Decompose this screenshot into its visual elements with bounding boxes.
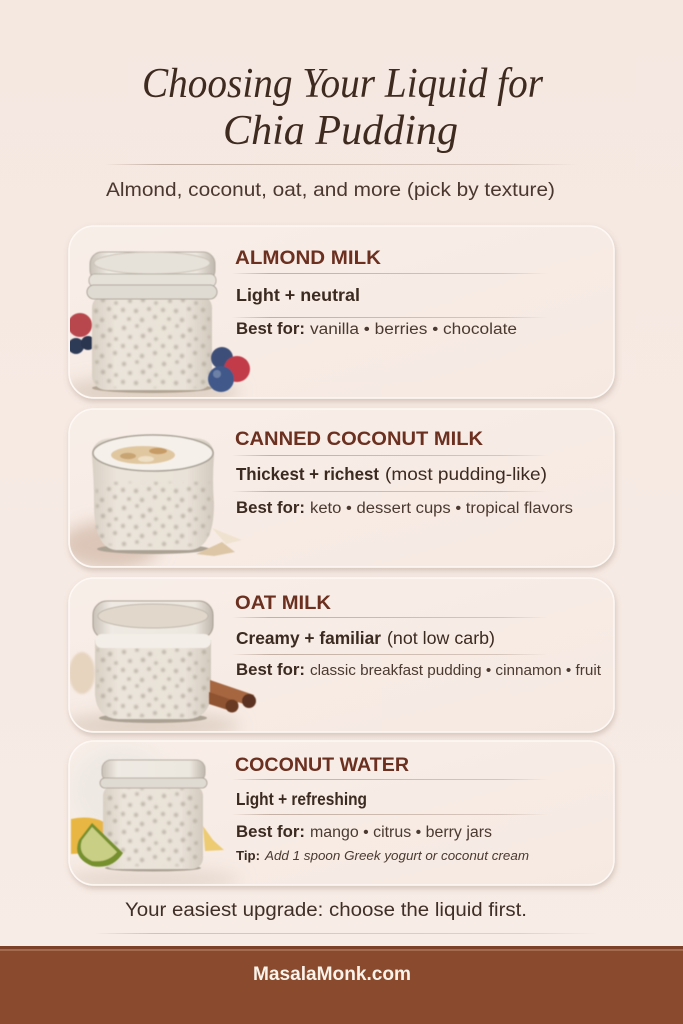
photo: coconut milk jar with flakes xyxy=(60,435,242,569)
best for: Best for: xyxy=(236,661,305,679)
texture: (most pudding-like) xyxy=(385,464,547,484)
texture: Light + neutral xyxy=(236,285,360,305)
panel: coconut water xyxy=(60,741,614,892)
best for: Best for: xyxy=(236,499,305,517)
subtitle: Almond, coconut, oat, and more (pick by texture) xyxy=(106,179,555,201)
best for xyxy=(236,661,601,679)
best for: keto • dessert cups • tropical flavors xyxy=(310,500,573,517)
texture: Creamy + familiar xyxy=(236,628,381,648)
heading: ALMOND MILK xyxy=(235,247,381,269)
photo: coconut water jar with citrus xyxy=(70,756,233,884)
heading: OAT MILK xyxy=(235,592,331,614)
panel: almond milk xyxy=(60,226,614,408)
texture xyxy=(236,628,495,648)
best for: classic breakfast pudding • cinnamon • fruit xyxy=(310,663,601,679)
best for: mango • citrus • berry jars xyxy=(310,824,492,841)
texture: Light + refreshing xyxy=(236,789,367,809)
title: Chia Pudding xyxy=(223,108,458,154)
best for: vanilla • berries • chocolate xyxy=(310,321,517,338)
panel: oat milk xyxy=(60,578,614,740)
closing line: Your easiest upgrade: choose the liquid first. xyxy=(125,900,527,921)
heading: CANNED COCONUT MILK xyxy=(235,428,483,450)
footer band xyxy=(0,946,683,1024)
heading: COCONUT WATER xyxy=(235,754,409,776)
best for xyxy=(236,823,492,841)
panel: canned coconut milk xyxy=(60,409,614,569)
texture xyxy=(236,464,547,484)
best for xyxy=(236,499,573,517)
title: Choosing Your Liquid for xyxy=(142,61,544,107)
photo: almond milk jar with berries xyxy=(70,251,251,397)
title xyxy=(142,61,544,154)
best for: Best for: xyxy=(236,320,305,338)
texture: Thickest + richest xyxy=(236,464,379,484)
photo: oat milk jar with cinnamon xyxy=(70,600,257,731)
best for: Best for: xyxy=(236,823,305,841)
tip: Tip: xyxy=(236,848,260,863)
texture: (not low carb) xyxy=(387,628,495,648)
footer website: MasalaMonk.com xyxy=(253,964,411,985)
best for xyxy=(236,320,517,338)
tip: Add 1 spoon Greek yogurt or coconut cream xyxy=(264,848,529,863)
